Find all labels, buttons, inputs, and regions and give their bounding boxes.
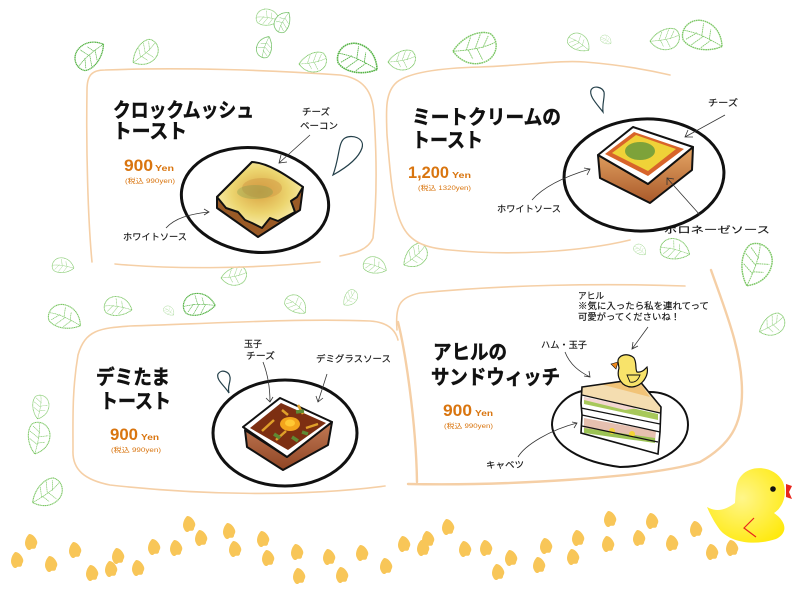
- title: [412, 106, 561, 152]
- title: トースト: [412, 130, 483, 152]
- label: ham, egg: ハム・玉子: [541, 340, 587, 350]
- panel: meat cream toast: [386, 62, 770, 253]
- plate handle: [333, 136, 362, 175]
- label: white sauce: ホワイトソース: [123, 232, 187, 242]
- icon: small duck: [611, 355, 647, 387]
- arrow: to white sauce: [532, 168, 590, 200]
- arrow: to cheese: [685, 115, 725, 137]
- plate handle: [218, 371, 230, 393]
- footprints trail: [11, 511, 738, 584]
- title: アヒルの: [433, 342, 507, 364]
- plate: [213, 380, 357, 486]
- price: (税込 1320yen): [418, 183, 471, 192]
- toast: [598, 127, 693, 203]
- price: [408, 163, 471, 192]
- label: cheese: チーズ: [708, 97, 738, 108]
- price: 900: [124, 156, 153, 175]
- price: (税込 990yen): [111, 445, 161, 454]
- toast: [243, 398, 332, 470]
- icon: large yellow duck: [707, 468, 792, 543]
- plate handle: [591, 87, 604, 112]
- leaves: top row: [70, 6, 729, 84]
- arrow: to bolognese sauce: [667, 178, 700, 215]
- price: Yen: [475, 409, 493, 418]
- panel outline: [87, 69, 376, 268]
- price: 1,200: [408, 163, 449, 182]
- title: デミたま: [96, 365, 170, 389]
- panel: croque monsieur toast: [87, 69, 376, 268]
- label: cabbage: キャベツ: [486, 460, 524, 470]
- price: 900: [443, 401, 472, 420]
- arrow: to small duck: [632, 327, 648, 349]
- leaves: middle and left: [22, 234, 788, 511]
- arrow: to demi-glace sauce: [316, 374, 327, 402]
- panel: demi-tama toast: [73, 320, 398, 493]
- price: [124, 156, 175, 185]
- title: [113, 99, 254, 143]
- price: Yen: [141, 433, 159, 442]
- arrow: to cheese and bacon: [279, 135, 310, 163]
- price: Yen: [155, 164, 174, 173]
- title: トースト: [113, 121, 187, 143]
- label: duck note: ※気に入ったら私を連れてって: [578, 300, 709, 311]
- price: [110, 425, 161, 454]
- panel right and left edges: [398, 270, 742, 484]
- title: クロックムッシュ: [113, 99, 254, 122]
- panel outline: [386, 62, 670, 253]
- price: Yen: [452, 171, 471, 180]
- price: 900: [110, 425, 138, 444]
- plate: [174, 138, 336, 262]
- arrow: to white sauce: [166, 209, 209, 228]
- label: egg, cheese: [244, 339, 275, 361]
- label: egg, cheese: 玉子: [244, 339, 262, 349]
- arrow: to ham and egg: [565, 352, 590, 377]
- panel outline: [397, 285, 685, 330]
- label: egg, cheese: チーズ: [246, 350, 275, 361]
- price: [443, 401, 493, 430]
- price: (税込 990yen): [444, 421, 493, 430]
- title: トースト: [100, 391, 171, 413]
- label: cheese, bacon: チーズ: [302, 106, 330, 117]
- title: サンドウィッチ: [431, 366, 560, 389]
- label: duck note: [578, 291, 709, 322]
- plate: [552, 391, 688, 467]
- arrow: to egg and cheese: [263, 362, 273, 402]
- toast: [217, 162, 303, 237]
- arrow: to cabbage: [518, 422, 577, 457]
- label: cheese, bacon: [300, 106, 338, 131]
- label: duck note: 可愛がってくださいね！: [578, 311, 680, 322]
- title: [431, 342, 560, 389]
- price: (税込 990yen): [125, 176, 175, 185]
- label: cheese, bacon: ベーコン: [300, 121, 338, 131]
- label: duck note: アヒル: [578, 291, 604, 301]
- panel: duck sandwich: [397, 270, 742, 484]
- sandwich: [581, 379, 661, 454]
- title: [96, 365, 171, 413]
- label: demi-glace sauce: デミグラスソース: [316, 353, 391, 364]
- label: bolognese sauce: ボロネーゼソース: [664, 224, 770, 235]
- plate: [561, 115, 727, 235]
- label: white sauce: ホワイトソース: [497, 204, 561, 214]
- panel outline: [73, 320, 398, 493]
- title: ミートクリームの: [412, 106, 561, 129]
